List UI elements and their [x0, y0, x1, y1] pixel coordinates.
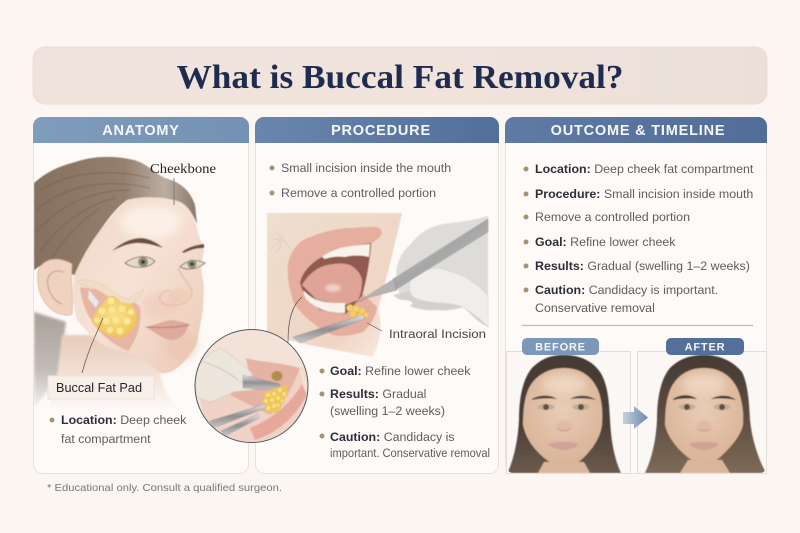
brows: [112, 238, 163, 251]
leader line: incision: [367, 323, 382, 331]
lips: [146, 320, 189, 340]
fat pad: [92, 296, 137, 338]
nose: [160, 268, 192, 305]
procedure bullets lower: Results: Gradual: [330, 387, 426, 401]
gloved hand: index finger: [409, 268, 488, 327]
outcome header: [505, 117, 767, 143]
footnote: * Educational only. Consult a qualified surgeon.: [47, 482, 282, 494]
leader line: fat pad: [82, 318, 103, 373]
procedure header: [255, 117, 499, 143]
bullet: location: fat compartment: [61, 432, 151, 446]
before photo: [506, 352, 630, 474]
forceps lower: [210, 404, 266, 428]
fat at incision: [346, 304, 369, 319]
skin: [267, 213, 402, 357]
label: cheekbone: Cheekbone: [150, 161, 216, 176]
outcome list: Remove a controlled portion: [535, 210, 690, 224]
outcome list: Procedure: Small incision inside mouth: [535, 187, 753, 201]
right skin: [301, 368, 308, 396]
before label: [522, 338, 599, 355]
procedure bullets lower: Goal: Refine lower cheek: [330, 364, 471, 378]
procedure bullets: [270, 161, 451, 200]
anatomy header: [33, 117, 249, 143]
after photo: [638, 352, 766, 474]
outcome list: Location: Deep cheek fat compartment: [535, 162, 754, 176]
outcome list: Results: Gradual (swelling 1–2 weeks): [535, 259, 750, 273]
outcome header: OUTCOME & TIMELINE: [551, 123, 725, 139]
panel: outcome and timeline: [505, 117, 767, 474]
gloved hand: lower fingers: [393, 290, 488, 327]
procedure bullets lower: important. Conservative removal: [330, 446, 490, 460]
hair falling behind neck: [34, 312, 66, 408]
illustration: intraoral incision: [267, 213, 488, 357]
bullet: location: [50, 413, 187, 446]
lower teeth: [303, 290, 345, 313]
outcome list: Conservative removal: [535, 301, 655, 315]
cavity: [230, 358, 300, 415]
forceps: [293, 315, 365, 343]
after label: AFTER: [685, 342, 725, 354]
title banner: [33, 47, 767, 104]
label: buccal fat pad: [48, 376, 154, 399]
dissected tissue: [78, 280, 144, 351]
scalpel tip: [358, 279, 397, 302]
lower tissue: [200, 370, 312, 445]
glove: [195, 348, 260, 402]
outcome list: Goal: Refine lower cheek: [535, 235, 676, 249]
after label: [666, 338, 744, 355]
procedure bullets: Small incision inside the mouth: [281, 161, 451, 175]
leader line: cheekbone: [174, 178, 175, 205]
gloved hand: back of hand: [396, 216, 488, 300]
bullet: location: Location: Deep cheek: [61, 413, 187, 427]
title banner: What is Buccal Fat Removal?: [176, 59, 624, 96]
anatomy header: ANATOMY: [102, 123, 180, 139]
ear: [38, 259, 73, 315]
inset circle: surgical close-up: [195, 330, 312, 445]
procedure bullets lower: (swelling 1–2 weeks): [330, 404, 445, 418]
procedure bullets: Remove a controlled portion: [281, 186, 436, 200]
lip band: [250, 384, 307, 440]
label: intraoral incision: Intraoral Incision: [389, 327, 486, 341]
neck: [52, 334, 170, 403]
procedure bullets lower: Caution: Candidacy is: [330, 430, 455, 444]
face: [73, 197, 204, 373]
procedure bullets lower: [320, 364, 490, 460]
panel: anatomy: [33, 117, 249, 474]
mouth cavity: [300, 243, 371, 314]
scalpel handle: [393, 219, 488, 289]
eyes: [125, 257, 155, 267]
leader line: inset: [288, 297, 302, 342]
outcome list: [524, 162, 754, 315]
cheek flush: [144, 294, 174, 314]
fat pad removed: [262, 385, 287, 413]
arrow: [623, 406, 648, 429]
procedure header: PROCEDURE: [331, 123, 431, 139]
panel: procedure: [255, 117, 499, 474]
hair: [34, 157, 197, 276]
illustration: woman's face with exposed buccal fat pad: [34, 157, 205, 408]
label: buccal fat pad: Buccal Fat Pad: [56, 381, 142, 395]
forceps upper: [243, 375, 280, 390]
before label: BEFORE: [535, 342, 586, 354]
upper teeth: [322, 244, 370, 259]
lips: [288, 227, 382, 336]
outcome list: Caution: Candidacy is important.: [535, 283, 718, 297]
tongue: [302, 264, 362, 305]
